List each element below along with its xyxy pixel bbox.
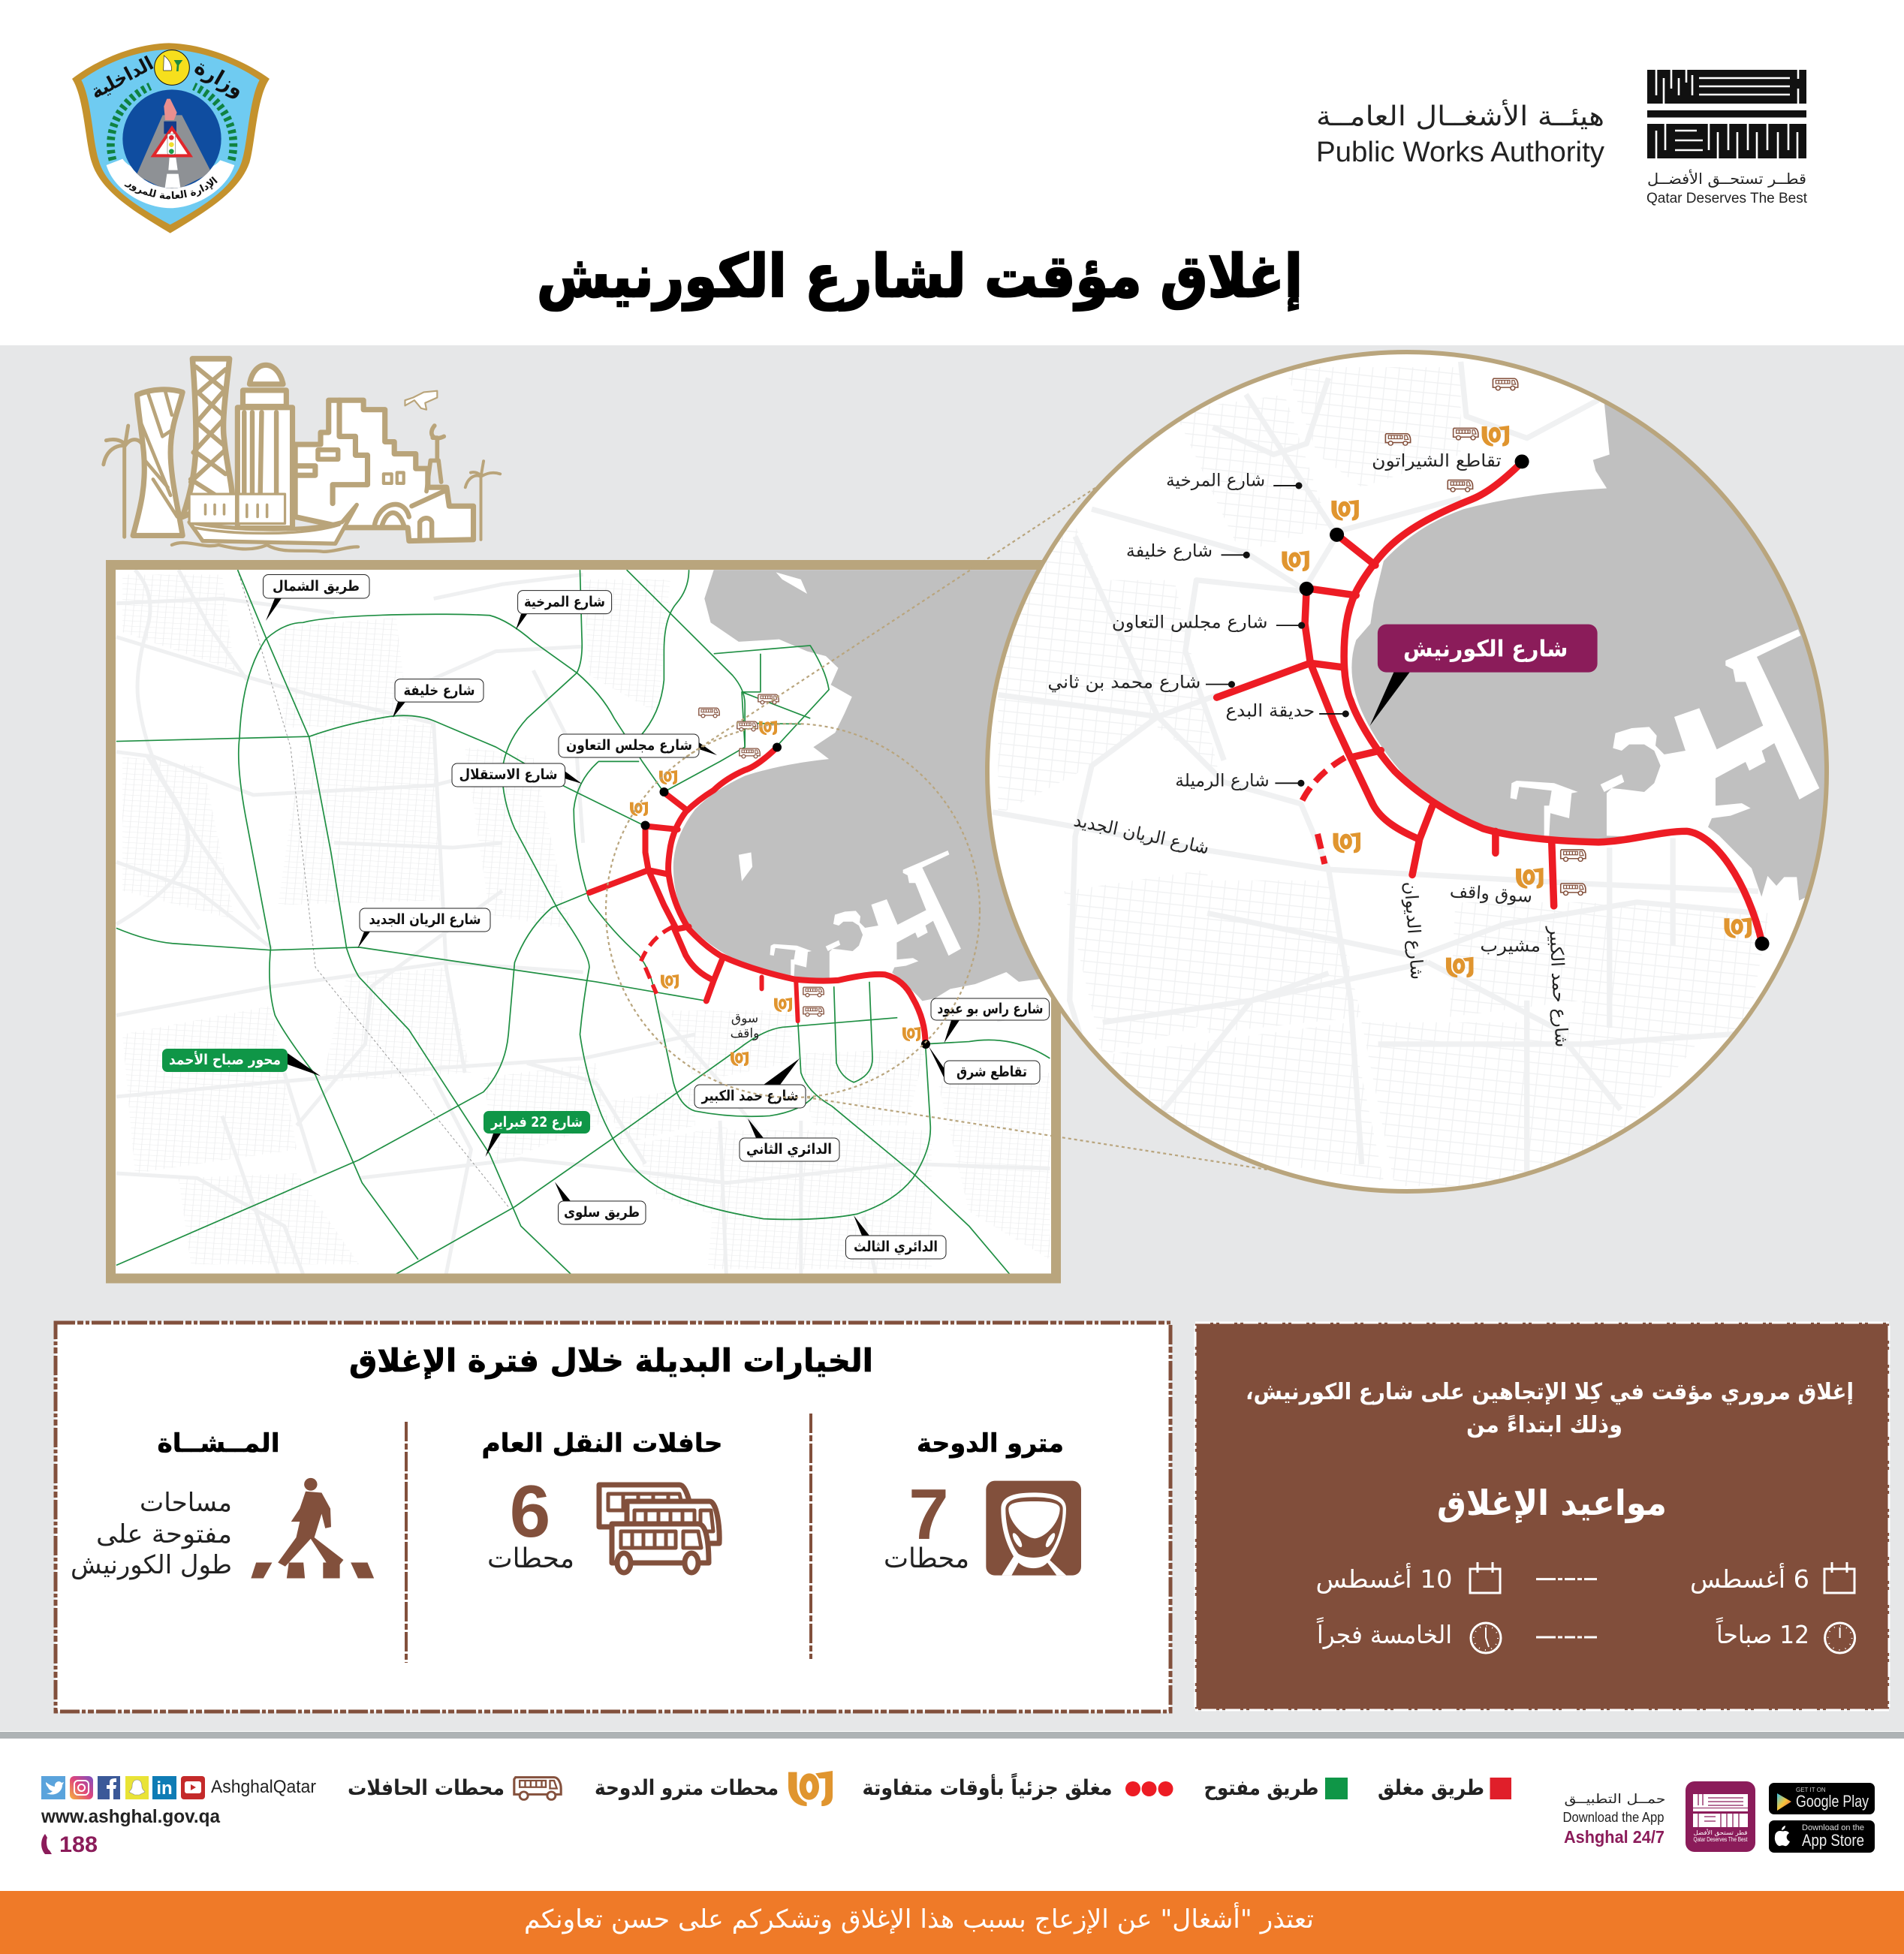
metro stations	[1282, 426, 1752, 977]
social handle: AshghalQatar	[211, 1777, 316, 1797]
column: doha metro	[884, 1429, 1081, 1576]
column: doha metro: محطات	[884, 1543, 969, 1574]
legend: bus stations: محطات الحافلات	[348, 1775, 505, 1800]
emblem: traffic department shield	[72, 43, 270, 233]
label: majlis al taawon street	[559, 734, 699, 757]
column: pedestrians: طول الكورنيش	[71, 1550, 232, 1580]
icon: right palm	[465, 461, 500, 540]
app icon: ashghal: قطر تستحق الأفضل	[1694, 1829, 1748, 1836]
label: souq waqif	[731, 1014, 758, 1040]
legend: closed road: طريق مغلق	[1378, 1775, 1484, 1800]
street labels: شارع خليفة	[1126, 540, 1213, 561]
icon: calendar end	[1470, 1562, 1500, 1593]
panel: inset Doha map	[111, 565, 1056, 1278]
red closed roads	[589, 747, 926, 1044]
icon: three buses	[599, 1485, 719, 1573]
icon: calendar start	[1824, 1562, 1854, 1593]
map sheet	[116, 569, 1052, 1274]
emblem: traffic department shield: الإدارة العامة للمرور	[125, 176, 218, 200]
water	[673, 570, 1056, 1001]
app icon: ashghal	[1686, 1781, 1755, 1852]
badge: app store	[1769, 1820, 1875, 1853]
road end markers	[1300, 454, 1770, 951]
Ashghal kufic logo: قطــر تستحــق الأفضــل	[1647, 170, 1806, 188]
dash separators	[1536, 1579, 1597, 1637]
app download text: Download the App	[1563, 1810, 1664, 1825]
street labels: مشيرب	[1480, 935, 1541, 956]
icon: clock end	[1471, 1623, 1501, 1653]
Public Works Authority wordmark: هيئــة الأشغــال العامــة	[1316, 99, 1604, 132]
badge: google play	[1769, 1783, 1875, 1814]
label: ras abu abboud street: شارع راس بو عبود	[937, 1001, 1044, 1017]
label: khalifa street	[395, 679, 484, 702]
panel border	[56, 1323, 1170, 1712]
bus stations	[699, 694, 824, 1016]
label pointers	[266, 598, 960, 1236]
label: hamad al kabeer street	[694, 1085, 806, 1108]
badge: google play: Google Play	[1796, 1792, 1869, 1811]
icon: dhow boat	[172, 494, 358, 552]
app download text: Ashghal 24/7	[1564, 1827, 1664, 1847]
street labels: شارع المرخية	[1166, 470, 1265, 491]
icon: minaret and crescent	[426, 426, 444, 492]
skyline illustration	[104, 359, 500, 552]
label: hamad al kabeer street: شارع حمد الكبير	[701, 1088, 799, 1104]
schedule text: 10 أغسطس	[1315, 1563, 1452, 1594]
column: pedestrians: مفتوحة على	[96, 1519, 232, 1549]
label: sabah al ahmad corridor	[162, 1049, 288, 1072]
icon: twitter	[41, 1776, 65, 1799]
street labels: سوق واقف	[1449, 881, 1533, 907]
icon: leaning tower	[133, 390, 182, 535]
Public Works Authority wordmark: Public Works Authority	[1316, 137, 1604, 168]
label: 22 february street: شارع 22 فبراير	[490, 1114, 583, 1131]
column: doha metro: مترو الدوحة	[917, 1429, 1064, 1459]
label: second ring	[740, 1138, 839, 1161]
callout: corniche street	[1370, 625, 1598, 726]
schedule text: الخامسة فجراً	[1316, 1617, 1452, 1649]
label: north road	[263, 575, 369, 598]
map contents clipped to frame	[116, 570, 1056, 1274]
map frame	[111, 565, 1056, 1278]
legend: metro stations	[595, 1771, 833, 1806]
column: pedestrians	[71, 1429, 374, 1580]
closure notice	[1246, 1379, 1854, 1438]
icon: linkedin: in	[156, 1778, 173, 1799]
label: third ring: الدائري الثالث	[854, 1239, 938, 1256]
circle outline	[987, 352, 1827, 1191]
emblem: traffic department shield: الداخلية	[86, 52, 157, 103]
schedule text: 12 صباحاً	[1716, 1617, 1809, 1649]
hotline 188: 188	[59, 1832, 98, 1857]
label: sharq intersection: تقاطع شرق	[957, 1064, 1027, 1080]
Public Works Authority wordmark	[1316, 99, 1604, 168]
street labels: حديقة البدع	[1225, 700, 1315, 721]
label: salwa road	[559, 1201, 646, 1224]
app icon: ashghal: Qatar Deserves The Best	[1694, 1836, 1748, 1843]
zoom callout: dashed circle and connectors	[606, 477, 1276, 1171]
label: souq waqif: واقف	[731, 1026, 759, 1041]
icon: youtube	[181, 1776, 205, 1799]
label: khalifa street: شارع خليفة	[404, 682, 474, 699]
label: 22 february street	[484, 1111, 590, 1134]
street labels: شارع حمد الكبير	[1545, 925, 1573, 1048]
panel: enlarged corniche map circle	[987, 352, 1841, 1191]
social media icons	[41, 1776, 316, 1799]
label: ras abu abboud street	[931, 998, 1050, 1020]
icon: domed tower	[237, 365, 293, 528]
schedule text: 6 أغسطس	[1690, 1563, 1809, 1594]
panel: closure schedule	[1195, 1323, 1889, 1710]
icon: seagull	[405, 391, 437, 410]
green open roads	[116, 570, 1050, 1274]
dotted rail line	[238, 570, 508, 1207]
label: sharq intersection	[944, 1061, 1040, 1084]
land: port and piers	[770, 851, 961, 980]
street labels	[1047, 450, 1573, 1048]
title: إغلاق مؤقت لشارع الكورنيش	[537, 243, 1303, 312]
label: third ring	[845, 1236, 946, 1259]
app download text: حمــل التطبيــق	[1565, 1792, 1665, 1807]
emblem: traffic department shield: وزارة	[191, 54, 249, 102]
legend: metro stations: محطات مترو الدوحة	[595, 1775, 779, 1800]
bus stations	[1385, 378, 1586, 895]
land: palm island	[739, 572, 807, 881]
street labels: شارع مجلس التعاون	[1112, 612, 1267, 633]
callout: corniche street: شارع الكورنيش	[1403, 637, 1568, 663]
water	[1351, 400, 1841, 901]
heading: closure times: مواعيد الإغلاق	[1437, 1483, 1667, 1523]
label: al istiqlal street: شارع الاستقلال	[459, 766, 557, 783]
icon: museum building	[295, 400, 474, 541]
footer banner: تعتذر "أشغال" عن الإزعاج بسبب هذا الإغلاق وتشكركم على حسن تعاونكم	[524, 1902, 1314, 1934]
label: salwa road: طريق سلوى	[564, 1204, 640, 1221]
label: new rayyan street: شارع الريان الجديد	[369, 911, 481, 928]
label: sabah al ahmad corridor: محور صباح الأحمد	[169, 1051, 281, 1068]
label: new rayyan street	[360, 908, 490, 932]
road end markers	[641, 743, 930, 1049]
icon: lattice tower	[182, 359, 232, 516]
footer banner	[0, 1891, 1904, 1954]
icon: instagram	[70, 1776, 93, 1799]
metro stations	[630, 721, 920, 1066]
column: pedestrians: مساحات	[140, 1488, 232, 1518]
panel background	[1195, 1323, 1889, 1710]
closure notice: وذلك ابتداءً من	[1466, 1412, 1622, 1438]
leader lines with dots	[1206, 483, 1348, 786]
street labels: شارع محمد بن ثاني	[1047, 672, 1201, 693]
label: al markhiya street	[518, 591, 612, 614]
column: doha metro: 7	[908, 1474, 949, 1555]
legend: partial closure: مغلق جزئياً بأوقات متفاوتة	[862, 1772, 1113, 1800]
badge: app store: Download on the	[1802, 1823, 1864, 1832]
label: souq waqif: سوق	[731, 1011, 758, 1026]
column: pedestrians: المــشــاة	[158, 1429, 279, 1459]
website: www.ashghal.gov.qa	[41, 1806, 221, 1827]
circle contents	[993, 362, 1841, 1186]
label: north road: طريق الشمال	[273, 578, 360, 595]
grey content band	[0, 345, 1904, 1731]
column: public buses	[482, 1429, 722, 1574]
street network	[116, 570, 1050, 1274]
street labels: شارع الرميلة	[1175, 770, 1270, 791]
Ashghal kufic logo	[1646, 70, 1808, 206]
Ashghal kufic logo: Qatar Deserves The Best	[1646, 191, 1808, 206]
app download text	[1563, 1792, 1665, 1847]
label: al istiqlal street	[452, 763, 565, 787]
street labels: شارع الديوان	[1400, 881, 1428, 980]
icon: snapchat	[125, 1776, 149, 1799]
column dividers	[406, 1414, 811, 1663]
column: public buses: محطات	[487, 1543, 574, 1574]
panel: alternative options	[56, 1323, 1170, 1712]
circle base	[987, 352, 1827, 1191]
legend	[348, 1771, 1511, 1806]
icon: clock start	[1825, 1623, 1855, 1653]
footer divider	[0, 1732, 1904, 1739]
street labels: شارع الريان الجديد	[1072, 809, 1211, 859]
label: majlis al taawon street: شارع مجلس التعاون	[566, 737, 692, 754]
land: port and piers	[1511, 629, 1819, 839]
badge: google play: GET IT ON	[1796, 1787, 1826, 1793]
icon: pedestrian on crossing	[251, 1478, 374, 1579]
column: public buses: حافلات النقل العام	[482, 1429, 722, 1459]
label: second ring: الدائري الثاني	[746, 1141, 832, 1158]
schedule rows	[1470, 1562, 1855, 1653]
badge: app store: App Store	[1802, 1831, 1864, 1850]
label: al markhiya street: شارع المرخية	[524, 594, 605, 610]
red closed roads	[1217, 462, 1762, 943]
street labels: تقاطع الشيراتون	[1372, 450, 1502, 471]
icon: metro train	[986, 1481, 1081, 1576]
closure notice: إغلاق مروري مؤقت في كِلا الإتجاهين على شارع الكورنيش،	[1246, 1379, 1854, 1405]
icon: left palm	[104, 426, 143, 537]
icon: facebook	[98, 1776, 120, 1799]
schedule text	[1315, 1563, 1809, 1649]
hotline 188	[41, 1832, 98, 1857]
column: public buses: 6	[510, 1470, 550, 1552]
streets	[998, 367, 1770, 1186]
icon: linkedin	[152, 1776, 176, 1799]
heading: alternatives: الخيارات البديلة خلال فترة الإغلاق	[349, 1342, 873, 1380]
legend: open road: طريق مفتوح	[1204, 1775, 1318, 1800]
